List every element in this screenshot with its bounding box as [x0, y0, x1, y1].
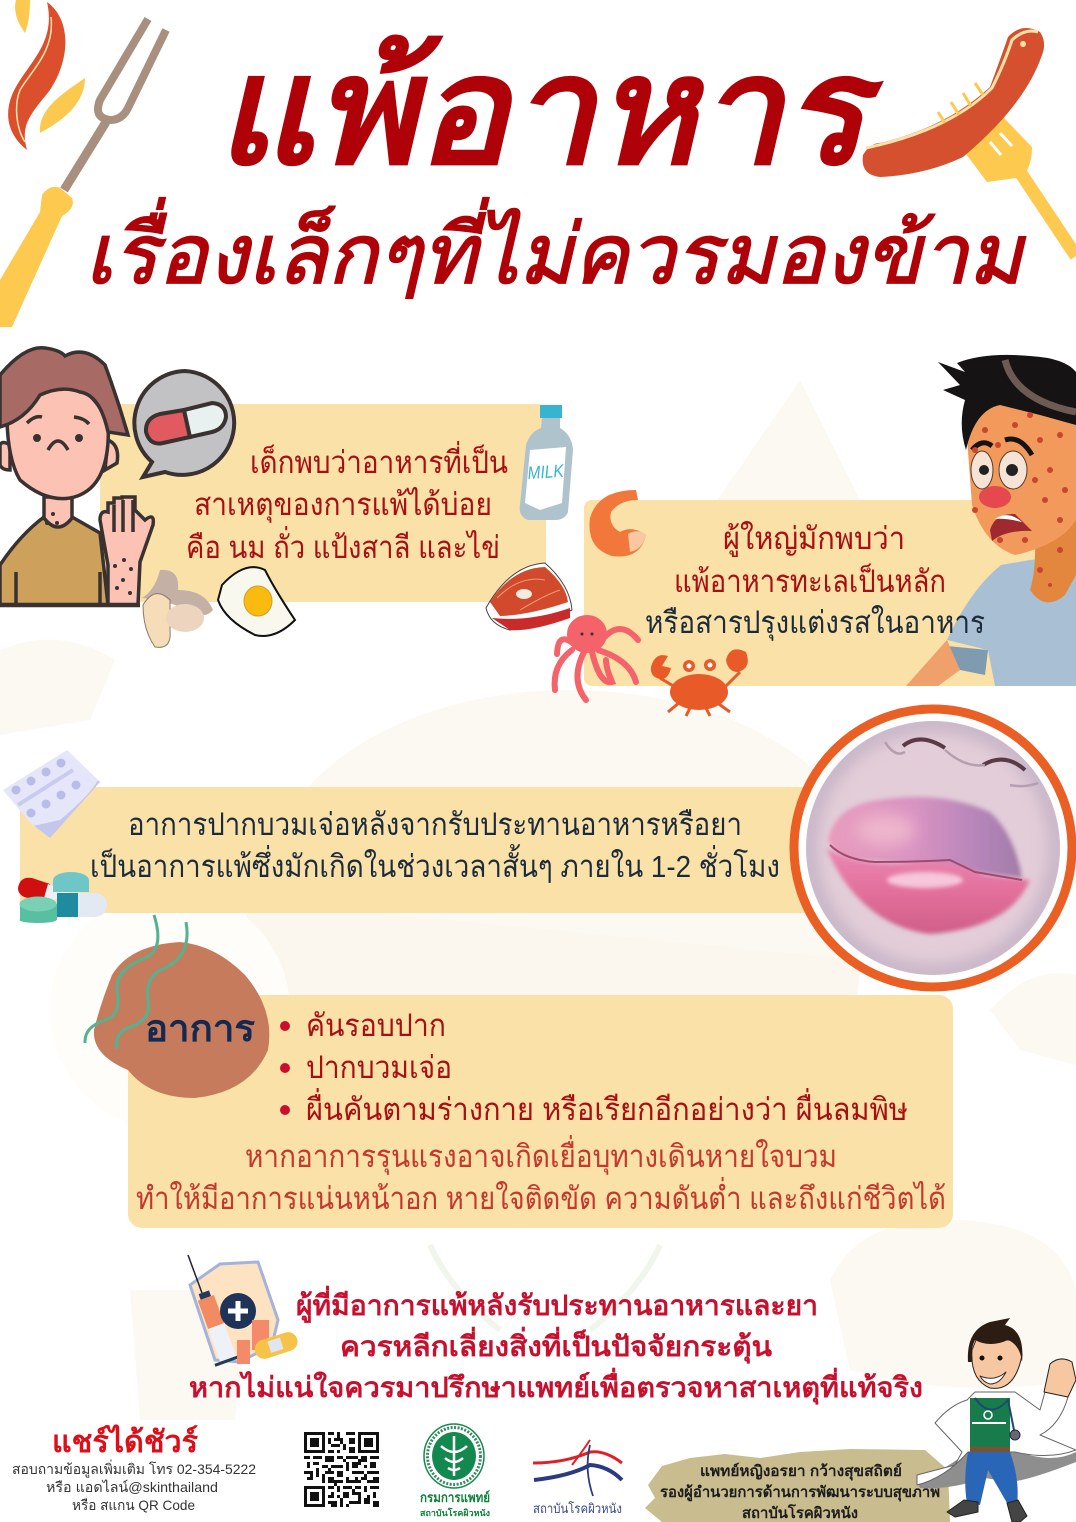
photo: swollen lips [794, 709, 1072, 987]
logo: Institute of Dermatology: สถาบันโรคผิวหนัง [533, 1501, 622, 1516]
banner: doctor name [645, 1449, 950, 1522]
logo: Department of Medical Services: กรมการแพทย์ [420, 1490, 490, 1505]
list: symptoms: ปากบวมเจ่อ [306, 1050, 452, 1085]
subtitle: เรื่องเล็กๆที่ไม่ควรมองข้าม [81, 198, 1043, 301]
footer: contact: หรือ แอดไลน์@skinthailand [46, 1479, 218, 1495]
illustration: adult with rash [906, 355, 1076, 686]
icon: shrimp [589, 490, 646, 557]
heading: symptoms badge: อาการ [145, 1008, 255, 1049]
icon: flames [8, 0, 85, 150]
text: advice: ผู้ที่มีอาการแพ้หลังรับประทานอาหารและยา [296, 1285, 818, 1323]
panel: adults [584, 500, 1050, 686]
icon: medicine shield [188, 1255, 300, 1367]
footer: contact: หรือ สแกน QR Code [72, 1497, 195, 1513]
icon: pill speech bubble [134, 371, 234, 477]
panel: symptoms [128, 995, 953, 1228]
text: severe symptoms warning: หากอาการรุนแรงอาจเกิดเยื่อบุทางเดินหายใจบวม [245, 1135, 837, 1176]
footer: contact [12, 1424, 256, 1513]
text: children allergy causes: เด็กพบว่าอาหารที่เป็น [250, 441, 508, 480]
illustration: doctor mascot [917, 1318, 1076, 1522]
text: adult allergy causes dark line: หรือสารปรุงแต่งรสในอาหาร [645, 605, 985, 642]
logo: Institute of Dermatology [533, 1440, 622, 1516]
text: advice [189, 1285, 923, 1405]
icon: fried egg [218, 567, 295, 636]
text: children allergy causes [186, 441, 508, 565]
panel: lip swelling [20, 787, 830, 913]
footer: contact: สอบถามข้อมูลเพิ่มเติม โทร 02-354-5222 [12, 1460, 256, 1478]
list: symptoms: ผื่นคันตามร่างกาย หรือเรียกอีกอย่างว่า ผื่นลมพิษ [306, 1088, 908, 1127]
text: severe symptoms warning [136, 1135, 946, 1216]
title: แพ้อาหาร [208, 27, 897, 196]
text: adult allergy causes: แพ้อาหารทะเลเป็นหลัก [674, 563, 946, 599]
text: advice: ควรหลีกเลี่ยงสิ่งที่เป็นปัจจัยกระตุ้น [340, 1326, 772, 1364]
icon: blister pack [3, 750, 100, 838]
list: symptoms [280, 1008, 908, 1127]
text: lip swelling description [90, 807, 780, 884]
banner: doctor name: รองผู้อำนวยการด้านการพัฒนาระบบสุขภาพ [660, 1484, 940, 1502]
text: children allergy causes: คือ นม ถั่ว แป้งสาลี และไข่ [186, 526, 500, 565]
icon: capsules [18, 872, 107, 923]
QR code [304, 1432, 379, 1507]
banner: doctor name: แพทย์หญิงอรยา กว้างสุขสถิตย์ [700, 1462, 902, 1481]
icon: nuts [142, 570, 213, 647]
text: adult allergy causes: ผู้ใหญ่มักพบว่า [723, 521, 905, 557]
logo: Department of Medical Services: สถาบันโรคผิวหนัง [420, 1507, 490, 1518]
panel: children [100, 404, 546, 602]
icon: milk bottle [520, 405, 573, 520]
text: lip swelling description: อาการปากบวมเจ่อหลังจากรับประทานอาหารหรือยา [128, 807, 742, 842]
text: adult allergy causes [674, 521, 946, 599]
icon: crab [651, 649, 748, 716]
icon: sausage on fork [863, 28, 1076, 256]
illustration: child with rash [0, 348, 153, 605]
footer: contact: แชร์ได้ชัวร์ [52, 1424, 198, 1459]
text: severe symptoms warning: ทำให้มีอาการแน่นหน้าอก หายใจติดขัด ความดันต่ำ และถึงแก่ชีวิตได้ [136, 1177, 946, 1216]
list: symptoms: คันรอบปาก [306, 1008, 446, 1043]
banner: doctor name: สถาบันโรคผิวหนัง [742, 1503, 858, 1522]
icon: raw meat [486, 563, 572, 630]
text: children allergy causes: สาเหตุของการแพ้ได้บ่อย [194, 487, 492, 524]
heading: symptoms badge [85, 915, 269, 1098]
icon: barbecue fork [0, 19, 166, 327]
icon: milk bottle: MILK [527, 461, 565, 483]
text: advice: หากไม่แน่ใจควรมาปรึกษาแพทย์เพื่อตรวจหาสาเหตุที่แท้จริง [189, 1367, 923, 1405]
logo: Department of Medical Services [420, 1424, 490, 1518]
text: lip swelling description: เป็นอาการแพ้ซึ่งมักเกิดในช่วงเวลาสั้นๆ ภายใน 1-2 ชั่วโมง [90, 844, 780, 884]
icon: octopus [555, 617, 638, 700]
